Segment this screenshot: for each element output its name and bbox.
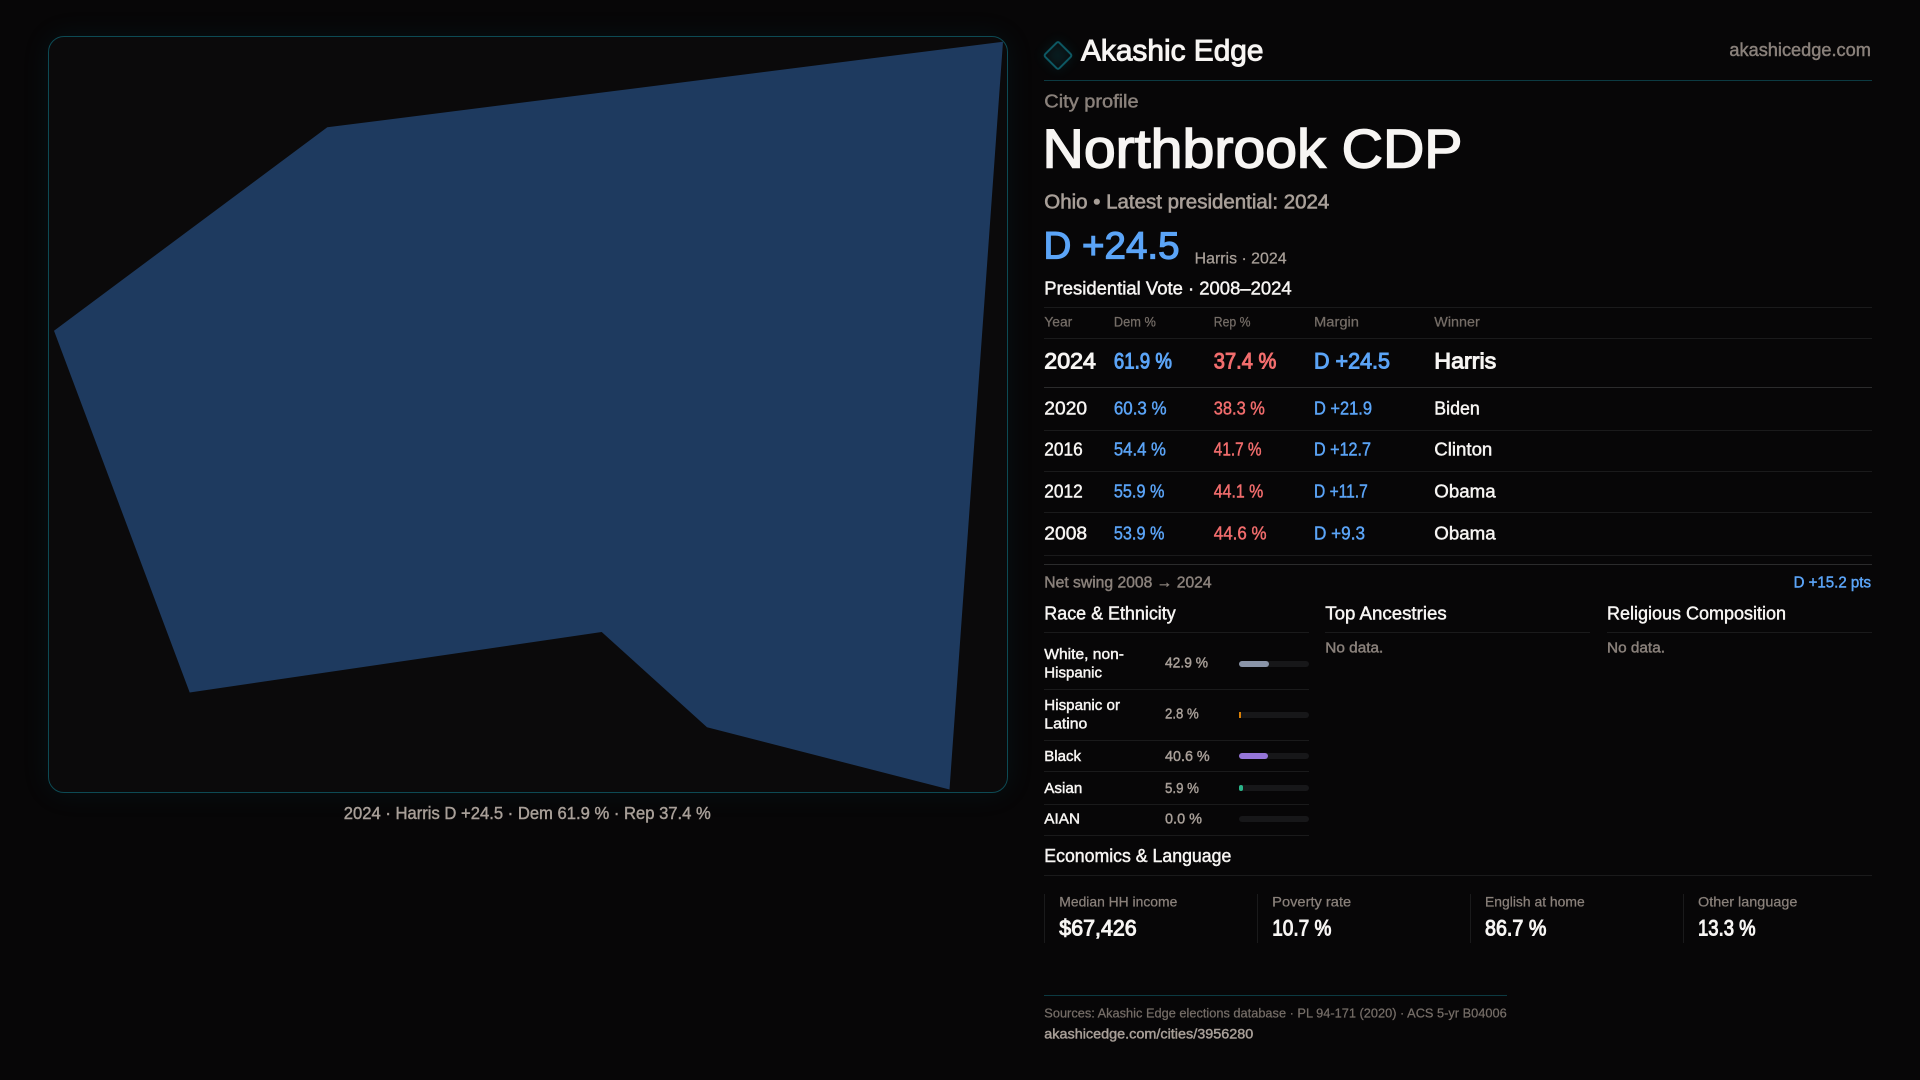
map caption: 2024 · Harris D +24.5 · Dem 61.9 % · Rep 37.4 % [344,803,711,823]
row 2020: D +21.9 [1314,399,1372,419]
table header row [1044,315,1480,330]
row: white non-hispanic: 42.9 % [1165,655,1208,672]
row 2016: D +12.7 [1314,440,1371,460]
row 2008: 2008 [1044,524,1087,544]
row 2012: 44.1 % [1214,482,1263,502]
stat: poverty rate: Poverty rate [1272,894,1351,910]
row 2008: Obama [1434,524,1497,544]
net swing label: Net swing 2008 → 2024 [1044,574,1212,591]
row: aian [1044,811,1309,828]
row: hispanic or latino [1044,697,1309,733]
row 2024: Harris [1434,348,1496,373]
row 2008: D +9.3 [1314,524,1365,544]
row 2020: 2020 [1044,399,1087,419]
subtitle: Ohio • Latest presidential: 2024 [1044,191,1329,213]
table header row: Margin [1314,315,1359,330]
row 2020: 60.3 % [1114,399,1167,419]
stat: english at home: English at home [1485,894,1585,910]
icon: brand diamond [1044,41,1072,70]
row: aian: 0.0 % [1165,811,1202,828]
panel: top ancestries [1325,603,1590,657]
row: asian: Asian [1044,780,1082,797]
net swing value: D +15.2 pts [1794,574,1871,591]
footer [1044,996,1507,1042]
row: hispanic or latino: Latino [1044,716,1087,733]
row 2024: 2024 [1044,348,1096,373]
stat: median household income: Median HH income [1059,894,1177,910]
presidential vote table [1044,315,1872,556]
row: white non-hispanic: Hispanic [1044,665,1102,682]
row: white non-hispanic: White, non- [1044,646,1124,663]
row 2016: 54.4 % [1114,440,1166,460]
row: aian: AIAN [1044,811,1080,828]
eyebrow: City profile [1044,91,1139,111]
panel: religious composition [1607,603,1872,657]
row 2016 [1044,440,1492,460]
row: asian: 5.9 % [1165,780,1199,797]
headline margin: D +24.5 [1044,226,1180,268]
stat: other language: Other language [1698,894,1798,910]
row 2012: 2012 [1044,482,1083,502]
row: asian [1044,780,1309,797]
row 2024: 37.4 % [1214,348,1276,373]
row 2008: 53.9 % [1114,524,1164,544]
stat: english at home [1470,894,1585,943]
row 2020: Biden [1434,399,1480,419]
page url: akashicedge.com/cities/3956280 [1044,1026,1254,1042]
table header row: Year [1044,315,1073,330]
row 2016: 41.7 % [1214,440,1262,460]
map panel [48,36,1008,793]
row 2012: Obama [1434,482,1497,502]
row 2024: D +24.5 [1314,348,1390,373]
row 2024: 61.9 % [1114,348,1172,373]
table header row: Dem % [1114,315,1156,330]
stat: poverty rate: 10.7 % [1272,916,1331,941]
stat: median household income: $67,426 [1059,916,1137,941]
row 2024 [1044,348,1496,373]
row 2016: 2016 [1044,440,1083,460]
brand name: Akashic Edge [1081,35,1264,68]
row 2020: 38.3 % [1214,399,1265,419]
header [1044,35,1872,80]
stat: median household income [1044,894,1177,943]
row 2008: 44.6 % [1214,524,1266,544]
heading: religious composition: Religious Composition [1607,603,1786,623]
stat: poverty rate [1258,894,1351,943]
title: Northbrook CDP [1042,117,1462,179]
table header row: Winner [1434,315,1480,330]
row 2020 [1044,399,1480,419]
no data note: No data. [1607,640,1665,657]
row 2012: 55.9 % [1114,482,1164,502]
stat: other language [1684,894,1798,943]
heading: top ancestries: Top Ancestries [1325,603,1447,623]
panel: economics and language [1044,846,1872,943]
vote table heading: Presidential Vote · 2008–2024 [1044,278,1292,298]
table header row: Rep % [1214,315,1250,330]
heading: race and ethnicity: Race & Ethnicity [1044,603,1176,623]
row: black: Black [1044,748,1081,765]
district map shape [54,42,1003,789]
row 2016: Clinton [1434,440,1492,460]
sources: Sources: Akashic Edge elections database · PL 94-171 (2020) · ACS 5-yr B04006 [1044,1006,1507,1021]
row: hispanic or latino: Hispanic or [1044,697,1120,714]
row: white non-hispanic [1044,646,1309,682]
city title block [1042,91,1462,268]
stat: other language: 13.3 % [1698,916,1756,941]
heading: economics and language: Economics & Language [1044,846,1231,866]
row: black: 40.6 % [1165,748,1210,765]
stat: english at home: 86.7 % [1485,916,1546,941]
no data note: No data. [1325,640,1383,657]
panel: race and ethnicity [1044,603,1309,836]
row: black [1044,748,1309,765]
row 2012 [1044,482,1497,502]
row 2012: D +11.7 [1314,482,1368,502]
site url: akashicedge.com [1729,40,1871,60]
row: hispanic or latino: 2.8 % [1165,706,1199,723]
row 2008 [1044,524,1497,544]
headline winner: Harris · 2024 [1195,251,1287,268]
